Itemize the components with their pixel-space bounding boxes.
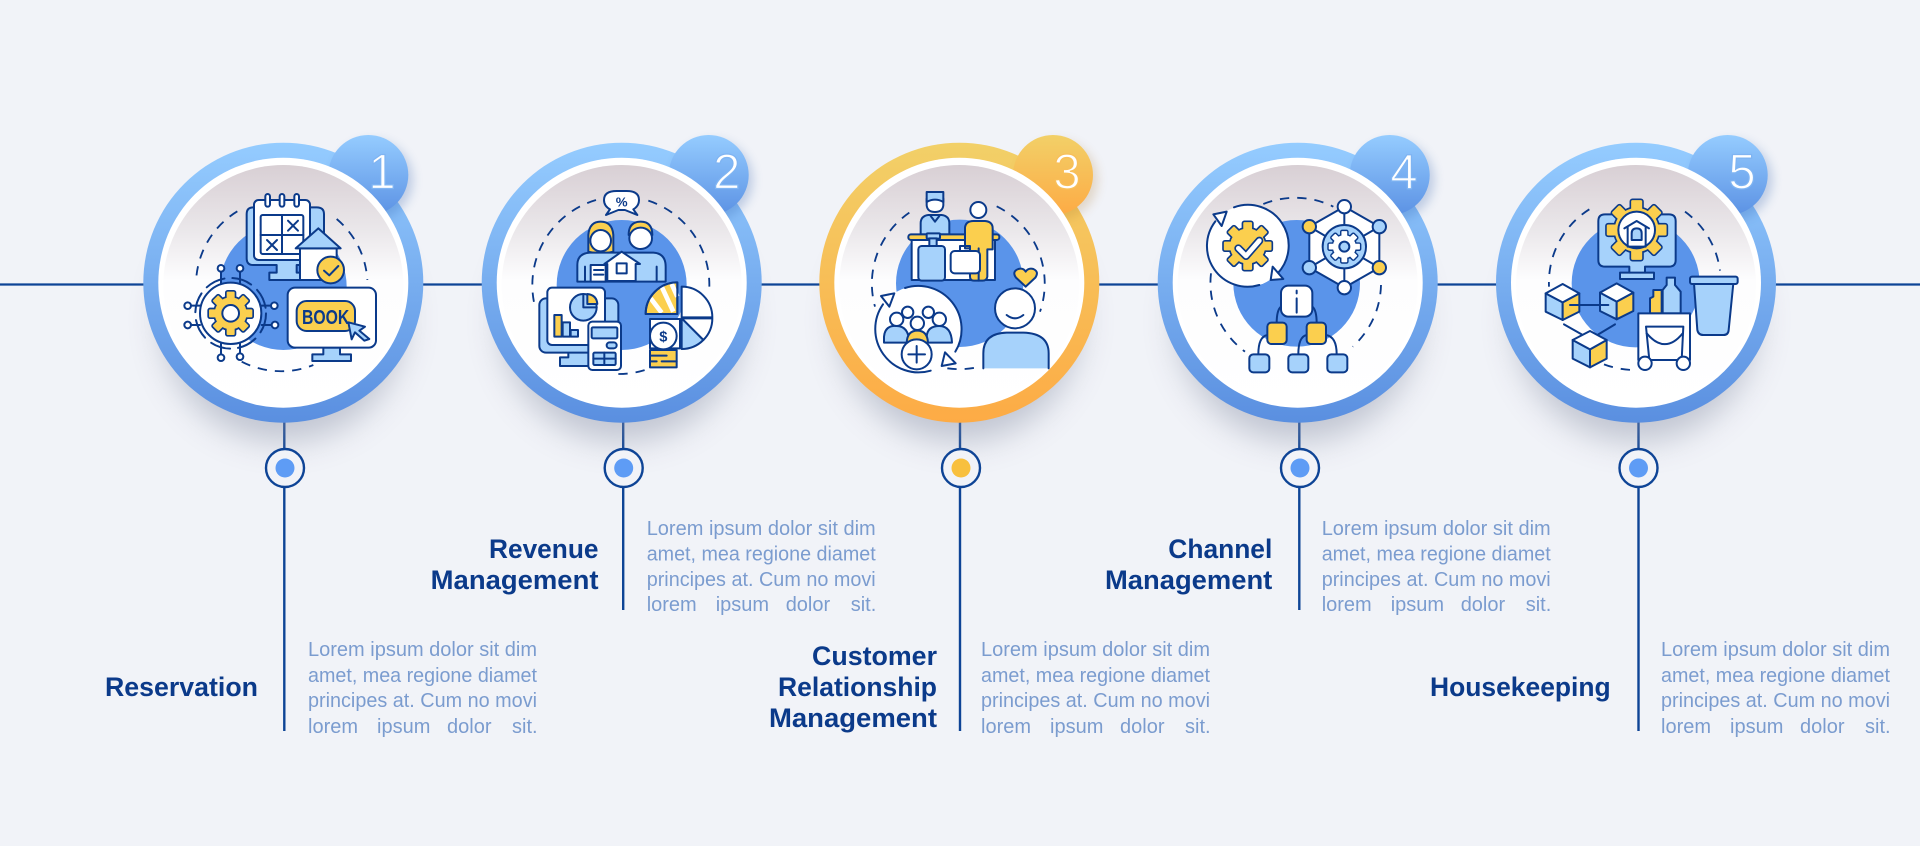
badge 3: [1013, 135, 1098, 220]
node marker 4: [1281, 449, 1319, 487]
body text 1: principes at. Cum no movi: [308, 690, 537, 712]
badge number 4: 4: [1390, 145, 1418, 199]
drop shadow 3: [837, 198, 1081, 442]
body text 1: lorem: [308, 716, 358, 738]
panel: step 3 Customer Relationship Management: [769, 135, 1211, 738]
connector line 3: [959, 400, 961, 731]
icon: housekeeping: [1546, 200, 1738, 370]
heading 2: Revenue: [489, 534, 598, 564]
heading 3: Customer: [812, 641, 937, 671]
connector line 5: [1637, 400, 1640, 731]
body text 1: amet, mea regione diamet: [308, 665, 537, 687]
badge 5: [1688, 135, 1772, 220]
icon: revenue management: $: [659, 329, 667, 345]
body text 4: [1322, 518, 1551, 616]
drop shadow 2: [500, 198, 744, 442]
heading 3: Management: [769, 703, 937, 733]
body text 2: lorem: [647, 594, 697, 616]
panel: step 2 Revenue Management: [431, 135, 876, 616]
icon: revenue management: %: [616, 194, 628, 209]
inner face 2: [497, 158, 747, 408]
body text 1: [308, 639, 538, 738]
body text 5: lorem: [1661, 716, 1711, 738]
body text 5: dolor: [1800, 716, 1845, 738]
heading 5: Housekeeping: [1430, 672, 1611, 702]
panel: step 4 Channel Management: [1105, 135, 1551, 616]
body text 2: dolor: [786, 594, 831, 616]
panel: step 5 Housekeeping: [1430, 135, 1891, 738]
inner face 3: [834, 158, 1084, 408]
drop shadow 5: [1514, 198, 1758, 442]
body text 5: ipsum: [1730, 716, 1783, 738]
heading 4: Channel: [1168, 534, 1272, 564]
body text 3: ipsum: [1050, 716, 1103, 738]
body text 5: Lorem ipsum dolor sit dim: [1661, 639, 1890, 661]
heading 2: Management: [431, 565, 598, 595]
body text 2: Lorem ipsum dolor sit dim: [647, 518, 876, 540]
body text 4: Lorem ipsum dolor sit dim: [1322, 518, 1551, 540]
body text 3: Lorem ipsum dolor sit dim: [981, 639, 1210, 661]
body text 2: [647, 518, 876, 616]
badge number 2: 2: [713, 145, 740, 199]
body text 4: sit.: [1526, 594, 1551, 616]
body text 4: lorem: [1322, 594, 1372, 616]
body text 1: Lorem ipsum dolor sit dim: [308, 639, 537, 661]
drop shadow 1: [161, 198, 405, 442]
panel: step 1 Reservation: [105, 135, 538, 738]
body text 3: lorem: [981, 716, 1031, 738]
body text 4: principes at. Cum no movi: [1322, 569, 1551, 591]
body text 2: ipsum: [716, 594, 769, 616]
inner face 1: [158, 158, 408, 408]
body text 1: ipsum: [377, 716, 430, 738]
horizontal timeline line: [0, 283, 1920, 286]
badge 2: [669, 135, 753, 220]
badge 1: [328, 135, 413, 220]
icon: customer relationship management: [872, 192, 1049, 373]
node marker 2: [605, 449, 643, 487]
body text 2: amet, mea regione diamet: [647, 544, 876, 566]
icon: reservation: [184, 194, 376, 371]
heading 1: Reservation: [105, 672, 258, 702]
badge number 5: 5: [1728, 145, 1756, 199]
body text 2: principes at. Cum no movi: [647, 569, 876, 591]
body text 3: sit.: [1185, 716, 1211, 738]
drop shadow 4: [1176, 198, 1420, 442]
icon: revenue management: [532, 191, 712, 374]
body text 3: [981, 639, 1211, 738]
inner face 4: [1173, 158, 1423, 408]
connector line 1: [283, 400, 285, 731]
heading 3: [769, 641, 937, 733]
icon: reservation: BOOK: [302, 307, 350, 329]
outer ring 5: [1496, 143, 1776, 423]
body text 3: dolor: [1120, 716, 1165, 738]
body text 3: amet, mea regione diamet: [981, 665, 1210, 687]
body text 1: dolor: [447, 716, 492, 738]
node marker 5: [1620, 449, 1658, 487]
body text 4: amet, mea regione diamet: [1322, 544, 1551, 566]
body text 3: principes at. Cum no movi: [981, 690, 1210, 712]
icon: channel management: [1207, 198, 1386, 372]
heading 4: [1105, 534, 1272, 595]
connector line 4: [1298, 400, 1301, 610]
badge 4: [1350, 135, 1434, 220]
node marker 3: [942, 449, 980, 487]
node marker 1: [266, 449, 304, 487]
body text 1: sit.: [512, 716, 538, 738]
outer ring 1: [143, 143, 423, 423]
heading 3: Relationship: [778, 672, 937, 702]
inner face 5: [1511, 158, 1761, 408]
outer ring 2: [482, 143, 762, 423]
outer ring 4: [1158, 143, 1438, 423]
body text 5: principes at. Cum no movi: [1661, 690, 1890, 712]
body text 4: ipsum: [1391, 594, 1444, 616]
connector line 2: [622, 400, 624, 610]
outer ring 3: [819, 143, 1099, 423]
body text 4: dolor: [1461, 594, 1506, 616]
body text 2: sit.: [851, 594, 876, 616]
body text 5: sit.: [1865, 716, 1891, 738]
heading 2: [431, 534, 598, 595]
body text 5: [1661, 639, 1891, 738]
badge number 3: 3: [1053, 145, 1081, 199]
body text 5: amet, mea regione diamet: [1661, 665, 1890, 687]
heading 4: Management: [1105, 565, 1272, 595]
badge number 1: 1: [368, 145, 396, 199]
